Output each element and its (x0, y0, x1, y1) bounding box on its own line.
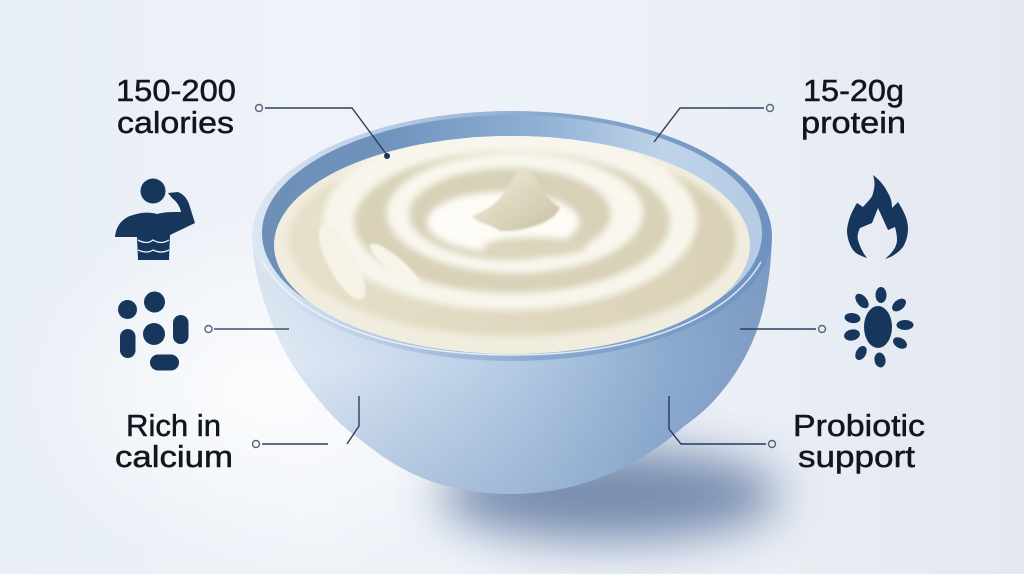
label: Rich in calcium: Rich in (126, 408, 221, 443)
callout line: right middle (740, 326, 826, 332)
bowl body (252, 236, 772, 494)
left gloss patches (318, 225, 366, 300)
bowl rim front highlight (263, 262, 761, 355)
icon: muscle torso (115, 178, 195, 260)
infographic canvas (94, 80, 924, 570)
bowl inner wall (262, 115, 762, 351)
icon: mineral dots and pills (118, 292, 188, 370)
inner shaded ring (409, 168, 611, 260)
label: Probiotic support: Probiotic (793, 408, 925, 443)
swirl peak (472, 167, 560, 231)
yogurt bowl (252, 111, 772, 494)
yogurt surface (274, 130, 750, 354)
outer shaded band (288, 173, 738, 338)
label: Rich in calcium (115, 408, 233, 474)
label: 15-20g protein: 15-20g (803, 73, 904, 108)
second highlight ring (387, 153, 643, 273)
callout line: probiotic (669, 396, 776, 448)
icon: probiotic bacterium (843, 287, 914, 368)
label: Probiotic support (793, 408, 925, 474)
callout line: calories (256, 104, 390, 159)
label: 15-20g protein: protein (801, 105, 906, 140)
label: Probiotic support: support (798, 439, 915, 474)
label: 150-200 calories: calories (117, 105, 234, 140)
icon detail: abdominal lines (138, 240, 169, 252)
callout line: protein (654, 104, 774, 142)
label: Rich in calcium: calcium (115, 439, 233, 474)
second shaded ring (354, 151, 670, 293)
lower inner shadow (483, 237, 587, 257)
bowl rim (252, 111, 772, 361)
outer highlight ring (323, 130, 697, 310)
label: 150-200 calories (116, 73, 236, 140)
label: 150-200 calories: 150-200 (116, 73, 236, 108)
callout line: calcium (252, 396, 359, 448)
bowl shadow (440, 449, 780, 541)
icon: flame (847, 175, 908, 259)
callout line: left middle (205, 326, 289, 332)
inner highlight (427, 192, 579, 252)
label: 15-20g protein (801, 73, 906, 140)
